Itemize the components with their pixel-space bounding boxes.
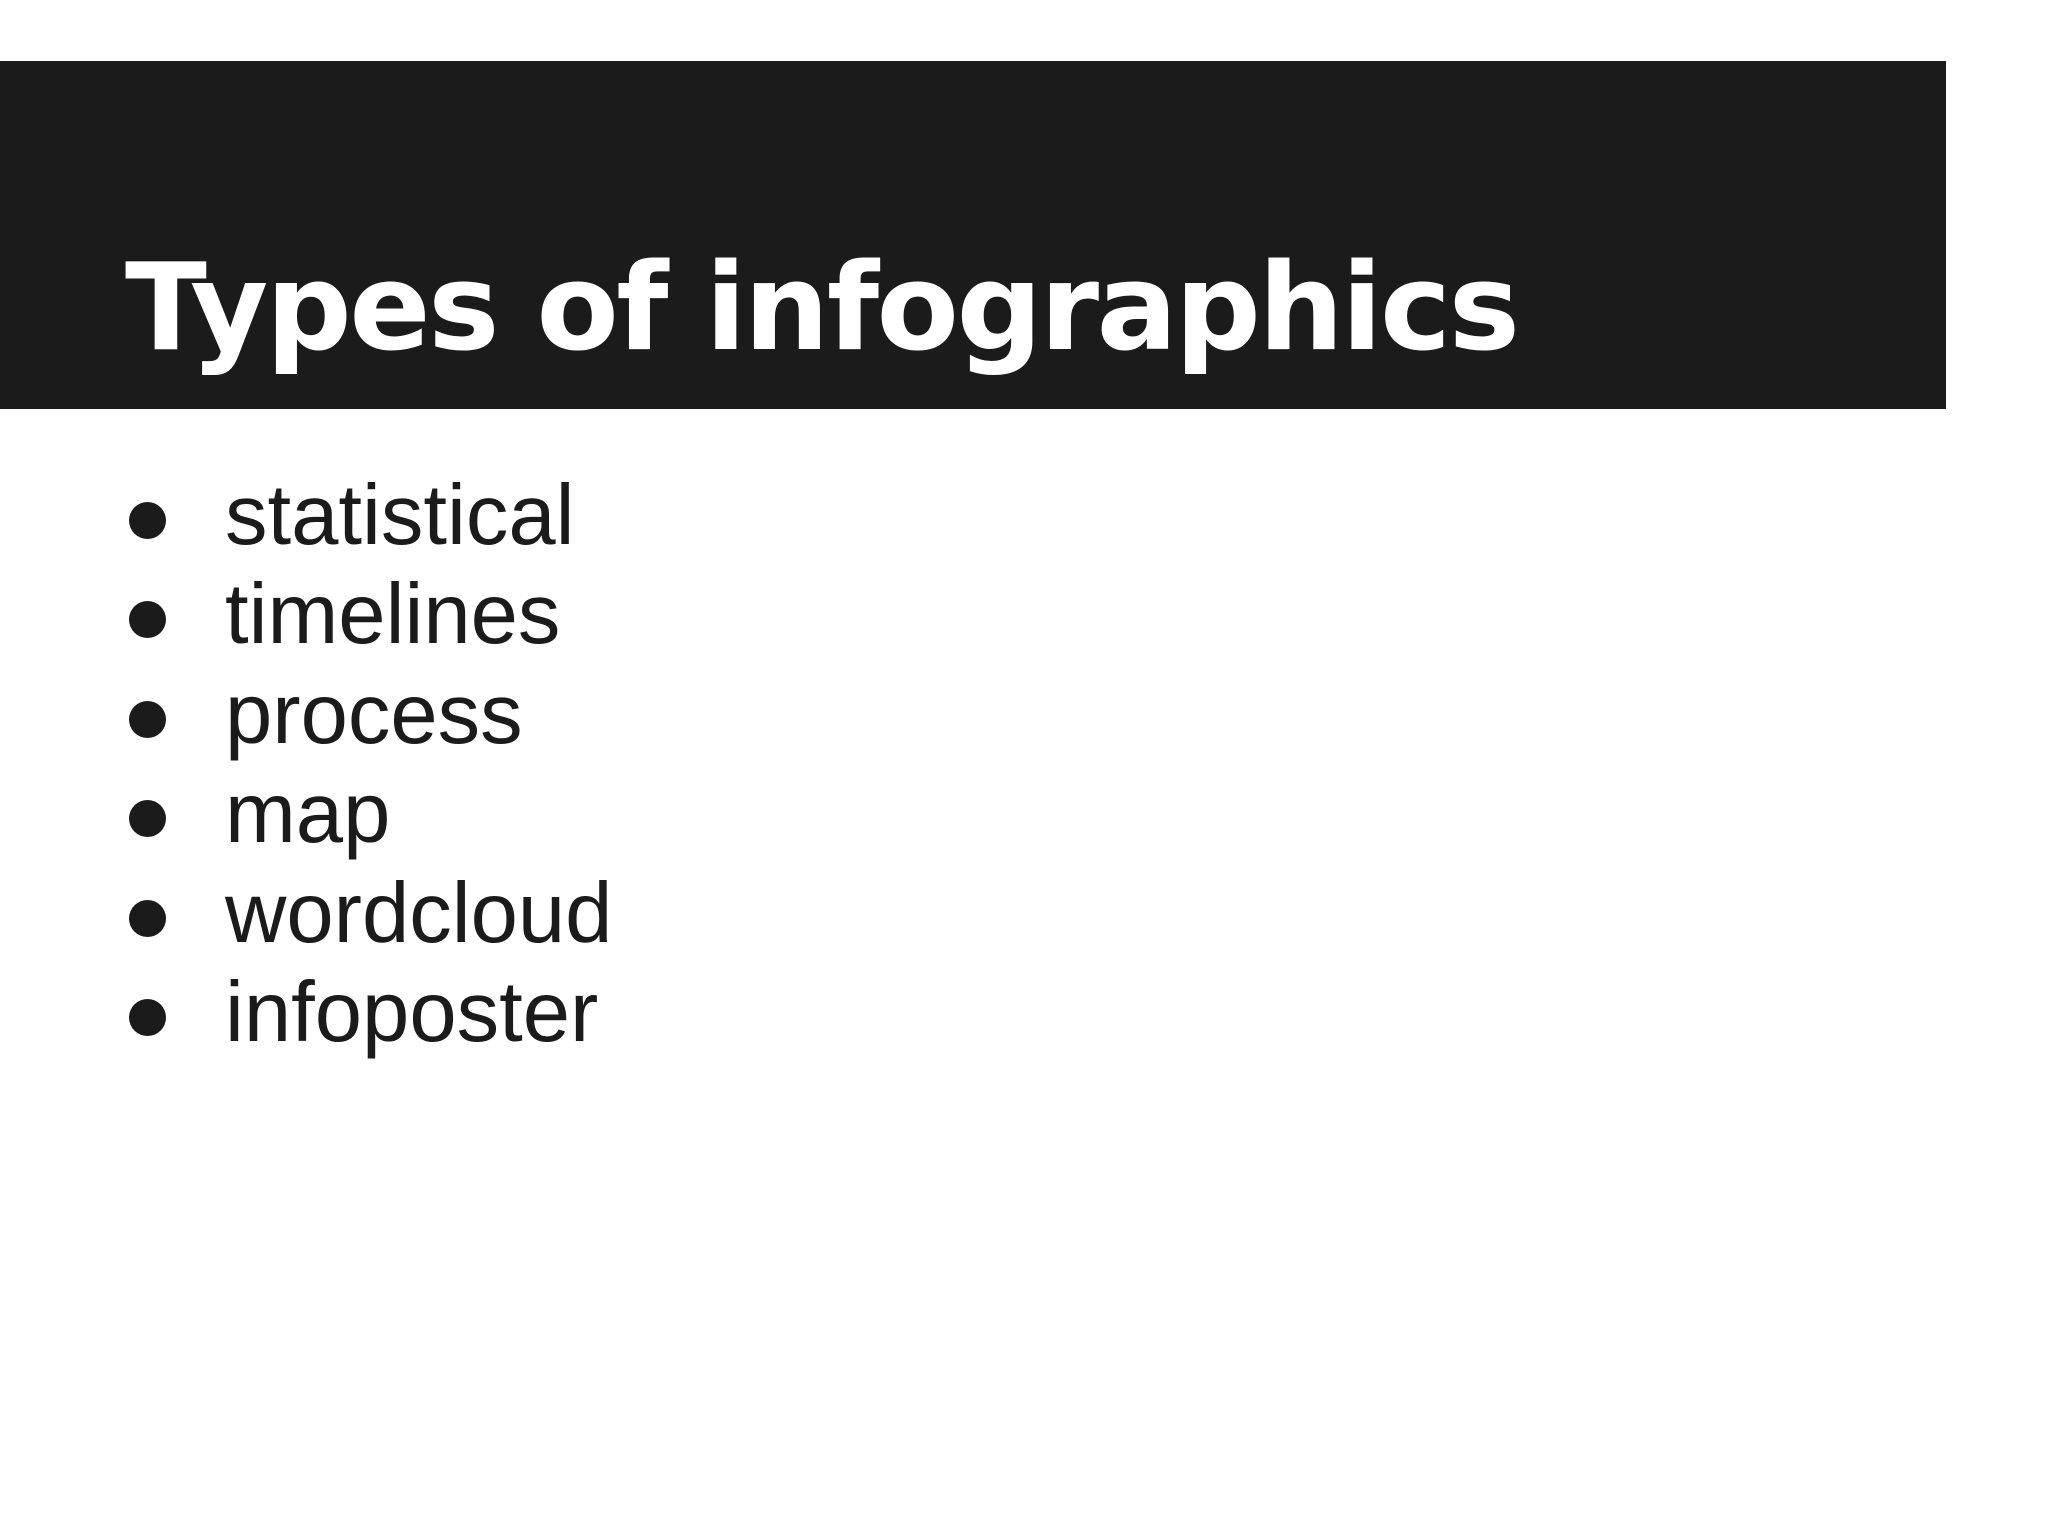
item: timelines: timelines: [225, 567, 560, 662]
item: map: map: [225, 766, 390, 861]
item: map: [129, 766, 390, 861]
item: process: process: [225, 667, 523, 762]
bullet list: [129, 468, 612, 1060]
item: wordcloud: wordcloud: [225, 866, 612, 961]
item: statistical: statistical: [225, 468, 575, 563]
title: Types of infographics: [125, 239, 1518, 378]
item: infoposter: infoposter: [225, 965, 598, 1060]
header band: [0, 61, 1946, 409]
